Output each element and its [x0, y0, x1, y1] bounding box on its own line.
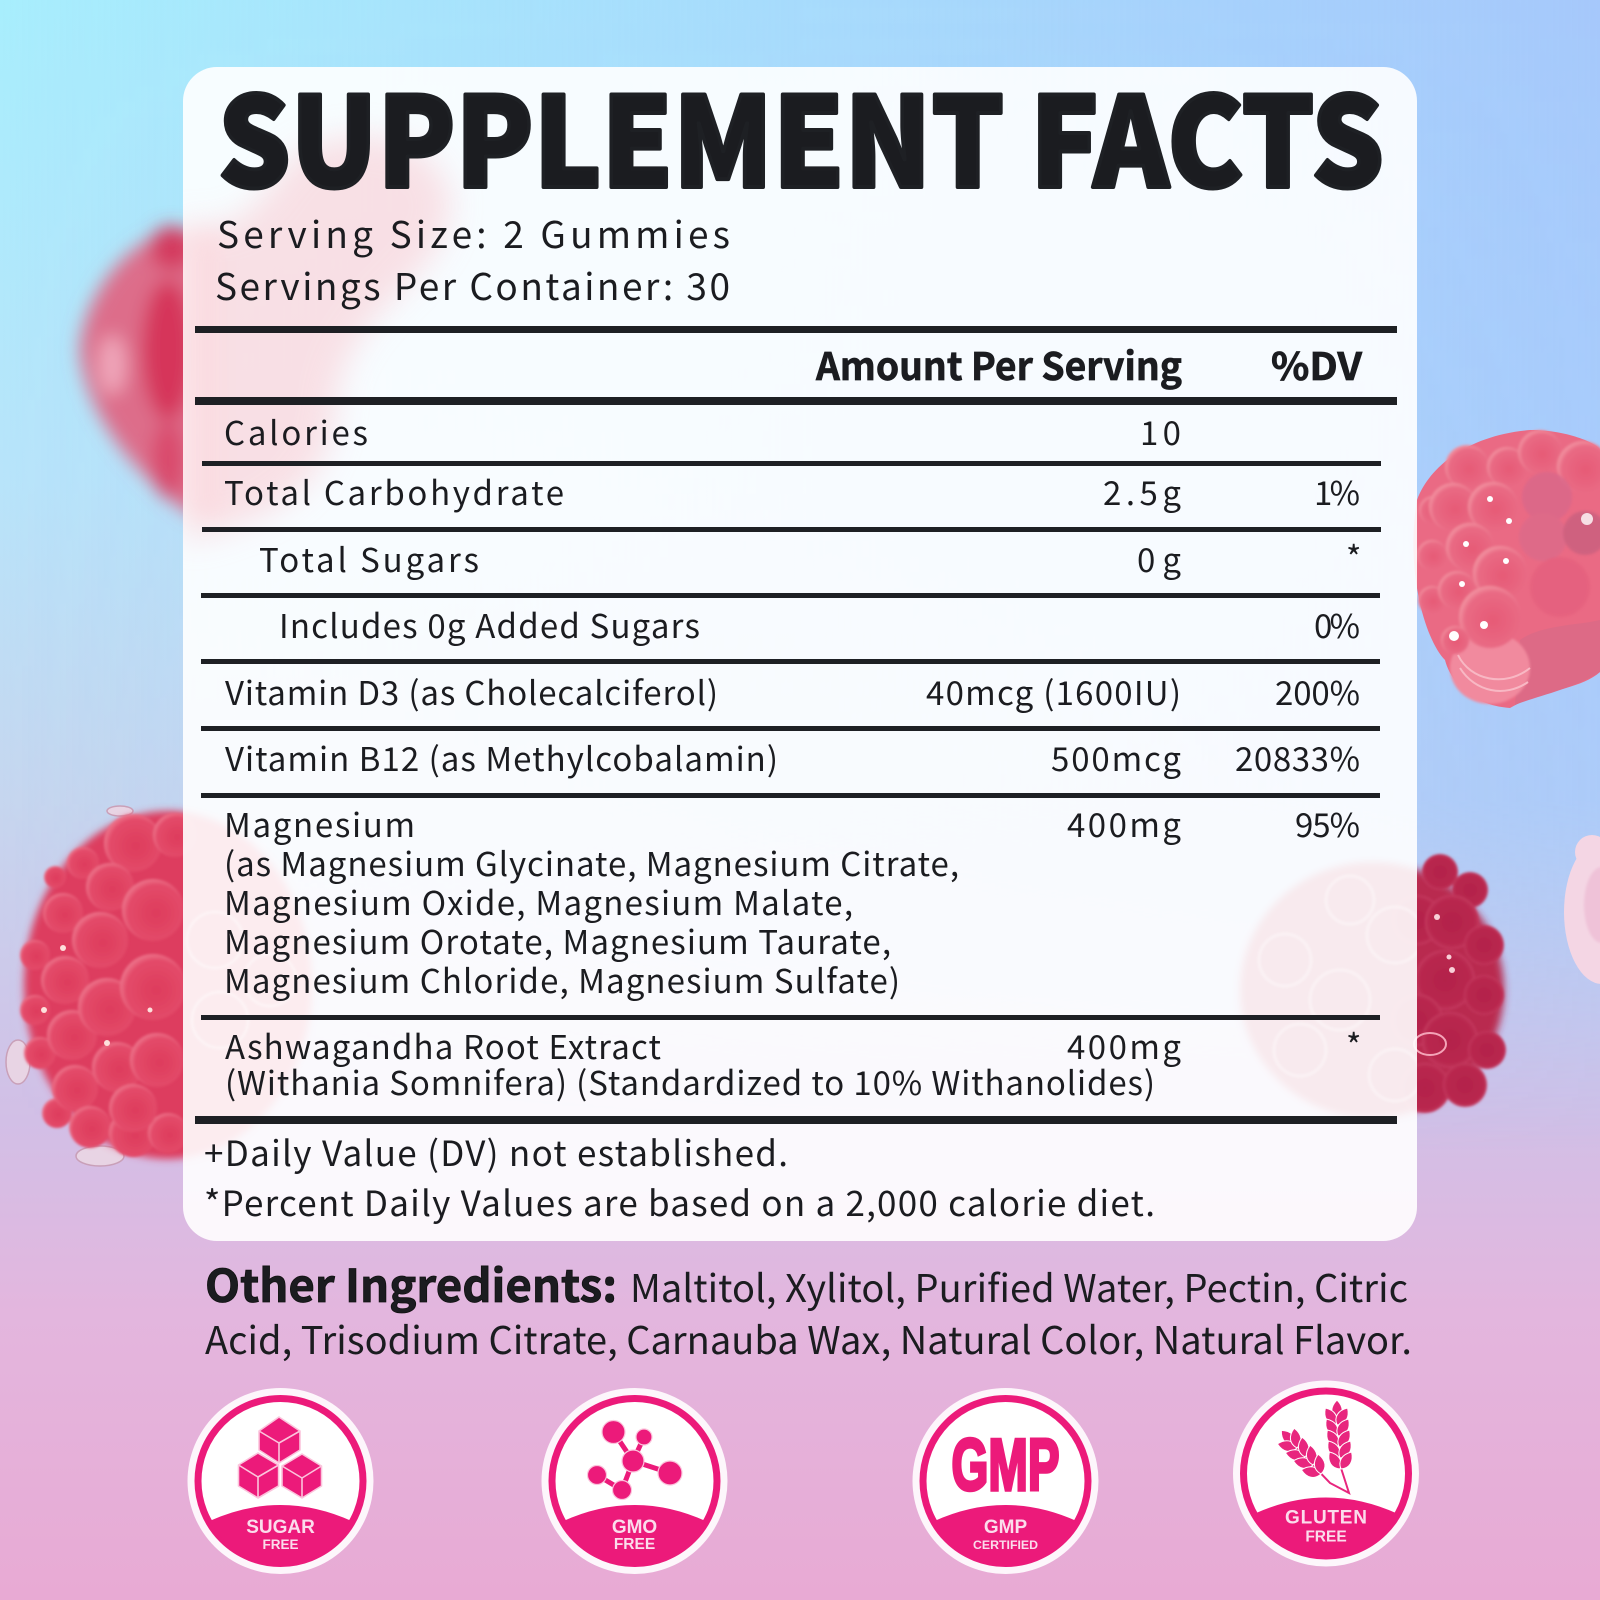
icon: sugar cubes [238, 1417, 322, 1498]
row: added sugars: Includes 0g Added Sugars [279, 600, 700, 648]
row: magnesium: Magnesium Chloride, Magnesium Sulfate) [224, 955, 900, 1003]
row: vitamin D3: 40mcg (1600IU) [926, 667, 1181, 715]
badge: gluten free: FREE [1305, 1528, 1347, 1546]
icon: GMP lettering: GMP [952, 1425, 1060, 1506]
row: calories [224, 407, 1181, 455]
row: total carbohydrate [224, 467, 1360, 515]
row: ashwagandha [225, 1020, 1361, 1105]
row: calories: Calories [224, 407, 368, 455]
other ingredients [205, 1250, 1412, 1365]
row: ashwagandha: 400mg [1067, 1021, 1181, 1069]
badge: sugar free [188, 1388, 374, 1574]
other ingredients: Maltitol, Xylitol, Purified Water, Pectin, Citric [630, 1258, 1408, 1313]
raspberry: blurred top left [80, 226, 220, 515]
badge: GMP certified: CERTIFIED [973, 1538, 1038, 1552]
row: magnesium: 400mg [1067, 799, 1181, 847]
footnotes: +Daily Value (DV) not established. [204, 1126, 788, 1177]
row: magnesium: Magnesium Oxide, Magnesium Malate, [224, 877, 853, 925]
raspberry: lower right [1240, 854, 1506, 1118]
row: total carbohydrate: 2.5g [1103, 467, 1181, 515]
footnotes: *Percent Daily Values are based on a 2,000 calorie diet. [204, 1176, 1155, 1227]
row: vitamin B12: 500mcg [1051, 733, 1181, 781]
water drops [6, 806, 133, 1166]
row: vitamin B12: 20833% [1235, 733, 1360, 781]
row: added sugars [279, 600, 1360, 648]
raspberry: bottom left [6, 806, 312, 1166]
footnotes [204, 1126, 1155, 1227]
icon: wheat [1276, 1400, 1356, 1493]
row: total sugars: Total Sugars [259, 534, 479, 582]
row: ashwagandha: (Withania Somnifera) (Standardized to 10% Withanolides) [225, 1057, 1155, 1105]
row: magnesium: 95% [1295, 799, 1360, 847]
row: ashwagandha: Ashwagandha Root Extract [225, 1021, 661, 1069]
table header: Amount Per Serving [815, 336, 1182, 391]
row: added sugars: 0% [1314, 600, 1360, 648]
icon: molecule [588, 1420, 682, 1500]
serving info [215, 205, 730, 311]
badge: GMO free: GMO [612, 1517, 657, 1538]
badge: GMP certified [912, 1388, 1098, 1574]
badge: sugar free: FREE [262, 1537, 299, 1552]
panel: facts card [183, 67, 1423, 1241]
serving info: Serving Size: 2 Gummies [217, 205, 730, 259]
row: total sugars: * [1346, 532, 1361, 580]
row: total carbohydrate: Total Carbohydrate [224, 467, 564, 515]
row: magnesium [224, 799, 1360, 1003]
badge: sugar free: SUGAR [246, 1517, 315, 1538]
row: total carbohydrate: 1% [1314, 467, 1360, 515]
badge: GMO free: FREE [614, 1536, 655, 1553]
raspberry: far right pale [1564, 835, 1600, 984]
row: ashwagandha: * [1346, 1020, 1361, 1068]
badge: GMP certified: GMP [984, 1517, 1027, 1538]
row: magnesium: Magnesium [224, 799, 415, 847]
badge: gluten free: GLUTEN [1285, 1508, 1367, 1528]
badge: gluten free [1233, 1380, 1419, 1566]
serving info: Servings Per Container: 30 [215, 257, 730, 311]
row: vitamin B12: Vitamin B12 (as Methylcobalamin) [225, 733, 778, 781]
row: magnesium: Magnesium Orotate, Magnesium Taurate, [224, 916, 891, 964]
raspberry: upper right [1413, 430, 1600, 708]
row: vitamin D3: Vitamin D3 (as Cholecalciferol) [225, 667, 718, 715]
row: total sugars [259, 532, 1361, 582]
badge: GMO free [542, 1388, 728, 1574]
row: vitamin D3 [225, 667, 1360, 715]
row: total sugars: 0g [1137, 534, 1181, 582]
table header: %DV [1271, 336, 1362, 391]
row: vitamin D3: 200% [1275, 667, 1360, 715]
table rules [195, 326, 1397, 1124]
title: SUPPLEMENT FACTS [218, 43, 1384, 223]
row: magnesium: (as Magnesium Glycinate, Magnesium Citrate, [224, 838, 959, 886]
other ingredients: Acid, Trisodium Citrate, Carnauba Wax, Natural Color, Natural Flavor. [205, 1310, 1412, 1365]
row: calories: 10 [1140, 407, 1181, 455]
other ingredients: Other Ingredients: [205, 1250, 617, 1315]
table header [815, 336, 1362, 391]
row: vitamin B12 [225, 733, 1360, 781]
